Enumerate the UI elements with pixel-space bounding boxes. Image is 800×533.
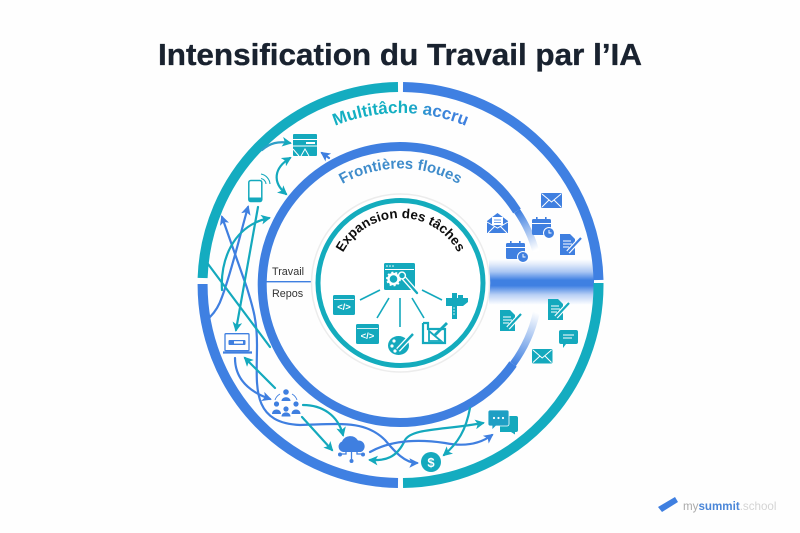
label: Multitâche accru: Multitâche accru bbox=[332, 100, 468, 126]
icon: main tool window bbox=[384, 263, 417, 293]
icon: document with pen lower left bbox=[500, 310, 521, 331]
icon: code window lower: </> bbox=[361, 331, 375, 342]
work / rest divider bbox=[263, 266, 313, 300]
icon: chat bubbles bbox=[488, 410, 518, 434]
icon: calendar lower bbox=[506, 241, 528, 262]
arrow: people to cloud curve bbox=[303, 405, 343, 435]
icon: caliper bbox=[446, 293, 468, 319]
icon: code window lower bbox=[356, 324, 379, 344]
arrow: laptop to people bbox=[235, 358, 270, 399]
arrow: to app window bbox=[262, 142, 290, 150]
icon: app window top bbox=[293, 134, 317, 156]
icon: laptop bbox=[223, 334, 252, 352]
outer ring bbox=[203, 87, 599, 483]
icon: envelope top bbox=[541, 193, 562, 208]
icon: speech bubble bbox=[559, 330, 578, 348]
inner circle bbox=[312, 194, 490, 372]
icon: envelope lower bbox=[532, 349, 552, 364]
icon: code window left: </> bbox=[337, 302, 351, 313]
arrow: people to cloud straight bbox=[302, 417, 332, 450]
arrow: ring to window bbox=[322, 153, 329, 158]
icon: smartphone with wifi bbox=[249, 174, 270, 202]
arrow: people to laptop bbox=[245, 358, 275, 388]
icon: dollar coin bbox=[421, 452, 441, 472]
icon: palette and brush bbox=[388, 334, 413, 355]
icon: code window left bbox=[333, 295, 355, 315]
middle ring bbox=[262, 146, 536, 422]
arrow: blue up to left bbox=[222, 217, 417, 463]
arrows: tangled workflow bbox=[208, 142, 492, 463]
label: Expansion des tâches: Expansion des tâches bbox=[336, 208, 463, 252]
arrow: window to phone double bbox=[277, 158, 290, 194]
gradient band: transition between work and rest bbox=[489, 259, 594, 305]
arrow: teal diagonal to ring bbox=[208, 264, 270, 347]
title: Intensification du Travail par l’IA bbox=[158, 37, 642, 72]
label: Travail: Travail bbox=[272, 266, 304, 278]
icon: calendar upper bbox=[532, 217, 554, 238]
icon: dollar coin: $ bbox=[427, 455, 435, 470]
icon: document with pen upper bbox=[560, 234, 581, 255]
label: Repos: Repos bbox=[272, 288, 304, 300]
icon: cloud network bbox=[338, 436, 365, 463]
spokes of task expansion bbox=[360, 290, 442, 327]
icon: document with pen lower right bbox=[548, 299, 569, 320]
logo text: mysummit.school bbox=[683, 500, 776, 513]
icon: blueprint and pencil bbox=[423, 323, 447, 343]
arrow: teal phone to laptop bbox=[236, 207, 258, 330]
arrow: to cloud and chat teal bbox=[370, 423, 483, 460]
label: Frontières floues: Frontières floues bbox=[338, 158, 461, 184]
icon: people network bbox=[272, 389, 300, 416]
arrow: blue up to phone bbox=[210, 207, 248, 317]
arrow: teal curve to right bbox=[222, 218, 269, 290]
logo: mysummit.school bbox=[658, 497, 776, 513]
icon: telescope bbox=[658, 497, 678, 512]
arrow: cloud to chat blue bbox=[370, 435, 492, 452]
icon: open envelope bbox=[487, 213, 508, 233]
arrow: ring to dollar bbox=[444, 408, 470, 455]
